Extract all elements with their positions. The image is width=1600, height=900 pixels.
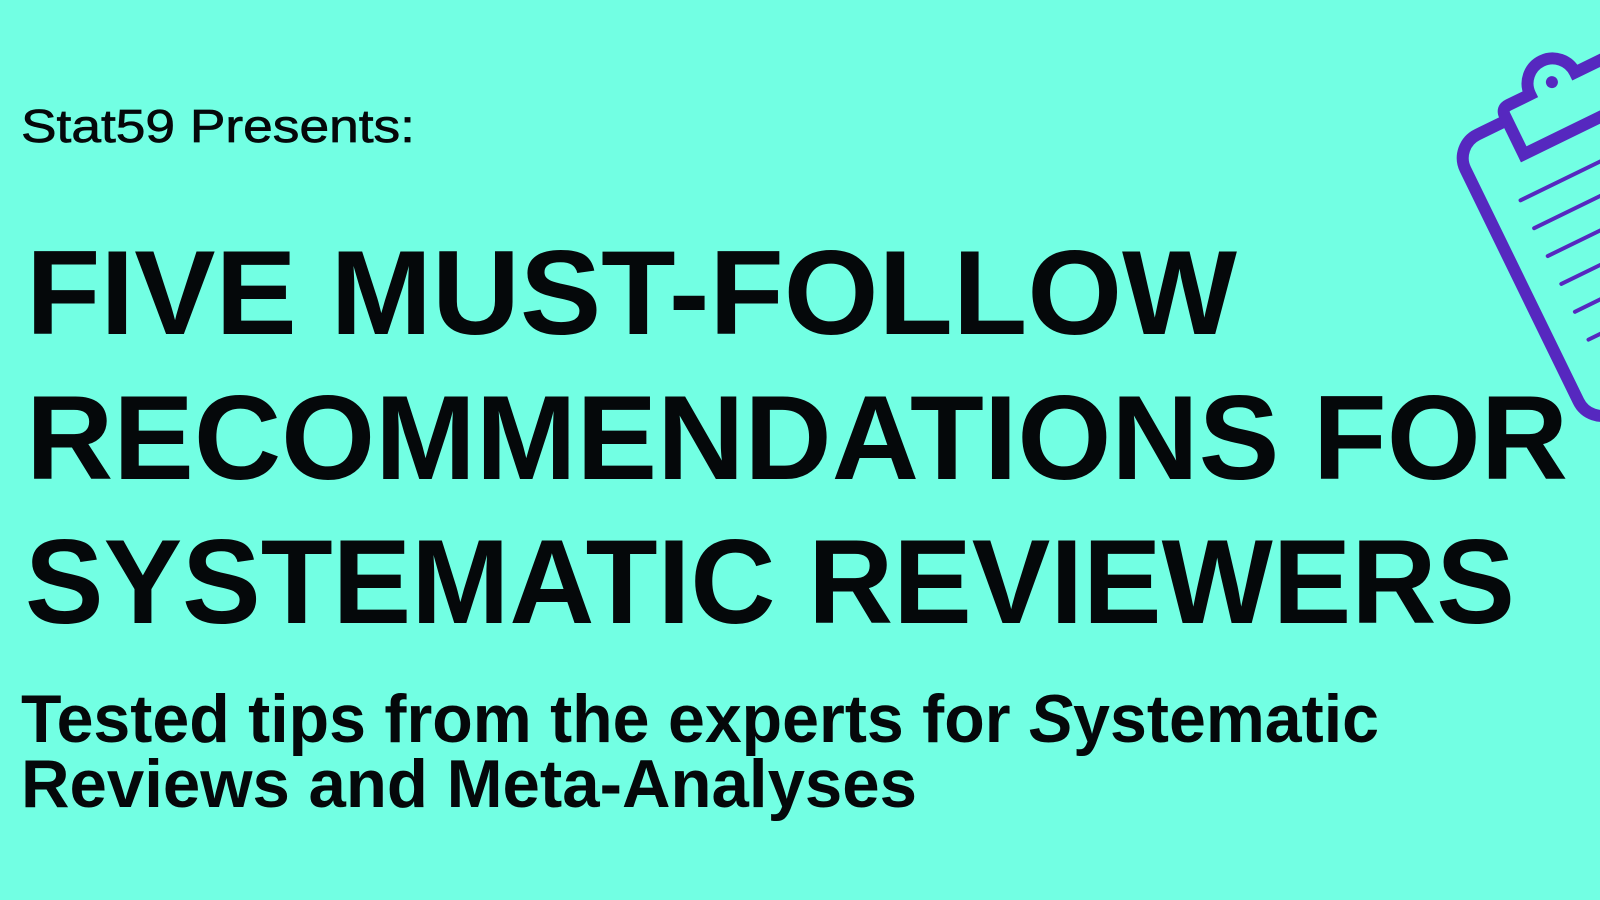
subtitle [21,681,1379,822]
icon: clipboard [1437,0,1600,425]
subtitle: Reviews and Meta-Analyses [21,746,917,822]
title: RECOMMENDATIONS FOR [26,371,1568,505]
subtitle: Tested tips from the experts for Systematic [21,681,1379,757]
title: FIVE MUST-FOLLOW [26,226,1238,360]
presenter line: Stat59 Presents: [21,100,415,152]
title: SYSTEMATIC REVIEWERS [25,515,1515,649]
title [25,226,1568,649]
